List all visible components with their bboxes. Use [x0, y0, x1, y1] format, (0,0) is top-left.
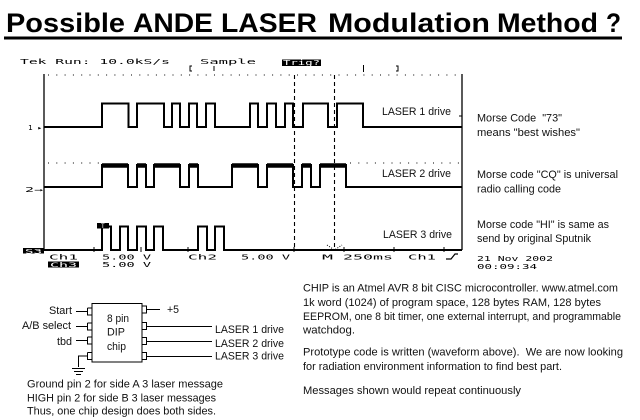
- title: Possible: [6, 8, 125, 38]
- text block: pin 2 note: HIGH pin 2 for side B 3 laser messages: [27, 393, 216, 405]
- text block: repeat note: Messages shown would repeat continuously: [303, 385, 521, 397]
- output label: laser 2 drive: LASER 2 drive: [215, 338, 284, 350]
- scope footer readout: 00:09:34: [477, 263, 537, 271]
- channel 2 waveform: [44, 165, 462, 187]
- label: start: Start: [49, 305, 72, 317]
- text block: prototype status: [303, 346, 623, 373]
- channel 3 marker: S3: [25, 248, 43, 255]
- note: morse code CQ: radio calling code: [477, 184, 561, 196]
- text block: pin 2 note: [27, 379, 223, 418]
- note: morse code HI: Morse code "HI" is same as: [477, 219, 609, 231]
- text block: chip description: CHIP is an Atmel AVR 8 bit CISC microcontroller. www.atmel.com: [303, 282, 618, 294]
- text block: prototype status: Prototype code is written (waveform above). We are now looking: [303, 346, 623, 358]
- trigger marker: T: [101, 223, 105, 230]
- channel 1 waveform: [44, 104, 462, 127]
- scope footer readout: Ch1: [408, 254, 436, 262]
- scope footer readout: 5.00 V: [241, 254, 290, 262]
- scope footer readout: Ch1: [49, 254, 78, 262]
- oscilloscope trace panel: [20, 58, 553, 271]
- chip label: [107, 313, 129, 353]
- note: morse code HI: [477, 219, 609, 245]
- scope footer readout: 5.00 V: [102, 254, 151, 262]
- note: morse code 73: means "best wishes": [477, 127, 580, 139]
- title: LASER: [221, 8, 317, 38]
- label: tbd: tbd: [57, 336, 72, 348]
- trigger marker: [97, 223, 109, 230]
- text block: chip description: 1k word (1024) of program space, 128 bytes RAM, 128 bytes: [303, 297, 601, 309]
- scope footer readout: 5.00 V: [102, 261, 151, 269]
- scope header readout: Trig?: [283, 59, 320, 67]
- text block: pin 2 note: Thus, one chip design does both sides.: [27, 406, 216, 418]
- title: [4, 8, 622, 40]
- scope header readout: Sample: [200, 58, 256, 66]
- label: laser 3 drive: LASER 3 drive: [383, 229, 452, 241]
- output label: laser 3 drive: LASER 3 drive: [215, 350, 284, 362]
- title: Method: [497, 8, 598, 38]
- chip label: DIP: [107, 326, 125, 338]
- chip label: 8 pin: [107, 313, 129, 325]
- scope footer readout: 21 Nov 2002: [477, 255, 553, 263]
- left pins: [76, 308, 92, 367]
- note: morse code 73: [477, 112, 580, 139]
- output label: laser 1 drive: LASER 1 drive: [215, 324, 284, 336]
- channel 1 marker: 1 ▸: [28, 124, 42, 132]
- label: laser 1 drive: LASER 1 drive: [382, 106, 451, 118]
- channel 2 marker: 2→: [25, 186, 43, 194]
- text block: chip description: EEPROM, one 8 bit timer, one external interrupt, and programmable: [303, 311, 621, 323]
- scope header readout: Tek Run: 10.0kS/s: [20, 58, 170, 66]
- title: ?: [606, 8, 621, 38]
- scope footer readout: M: [322, 254, 333, 262]
- scope footer readout: Ch2: [188, 254, 217, 262]
- text block: pin 2 note: Ground pin 2 for side A 3 laser message: [27, 379, 223, 391]
- text block: prototype status: for radiation environment information to find best part.: [303, 361, 562, 373]
- scope footer readout: Ch3: [50, 261, 77, 269]
- title: ANDE: [133, 8, 213, 38]
- scope footer readout: [48, 254, 553, 271]
- DIP chip pinout diagram: [22, 304, 284, 374]
- title: Modulation: [328, 8, 490, 38]
- note: morse code HI: send by original Sputnik: [477, 233, 591, 245]
- label: +5: +5: [167, 304, 179, 316]
- scope footer readout: 250ms: [343, 254, 393, 262]
- note: morse code CQ: Morse code "CQ" is universal: [477, 169, 618, 181]
- channel 3 waveform: [44, 226, 462, 250]
- text block: chip description: [302, 282, 621, 336]
- chip label: chip: [107, 341, 126, 353]
- icon: ground symbol: [72, 368, 85, 374]
- channel 3 marker: [23, 248, 44, 255]
- scope frame and grid: [44, 74, 462, 252]
- label: A/B select: A/B select: [22, 320, 71, 332]
- text block: chip description: watchdog.: [302, 324, 355, 336]
- scope header readout: [20, 58, 398, 72]
- note: morse code 73: Morse Code "73": [477, 112, 562, 124]
- label: laser 2 drive: LASER 2 drive: [382, 168, 451, 180]
- right pins and output wires: [142, 306, 212, 360]
- chip body: [92, 304, 142, 362]
- note: morse code CQ: [477, 169, 618, 196]
